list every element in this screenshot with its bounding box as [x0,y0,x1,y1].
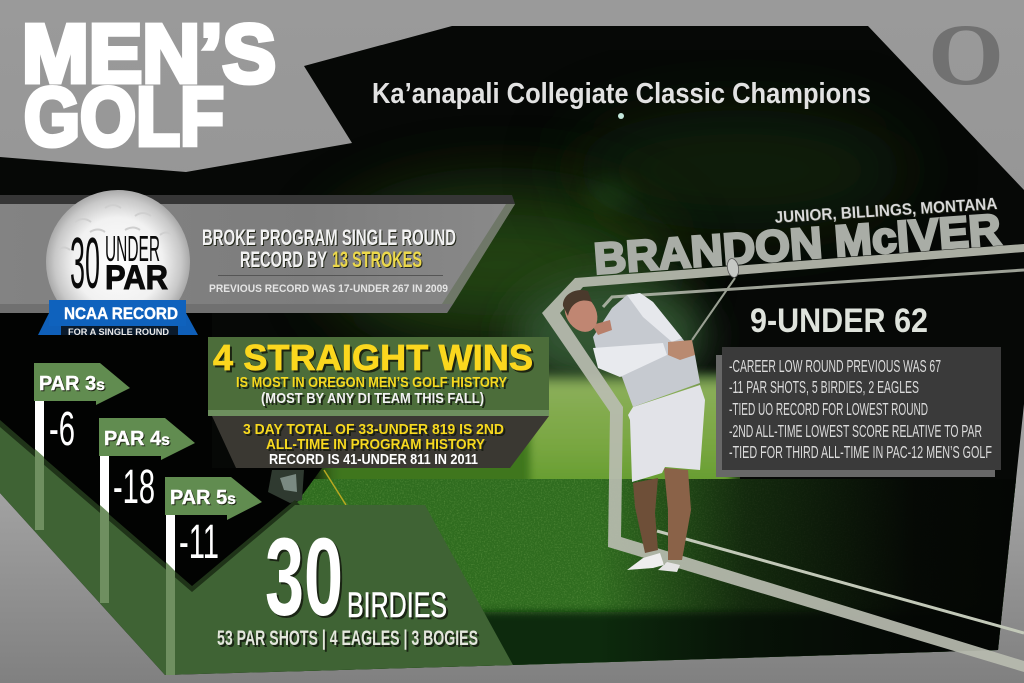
par 5s stat [165,477,262,675]
record text: BROKE PROGRAM SINGLE ROUND [202,225,456,250]
green stats panel [0,420,513,675]
record text: 13 STROKES [332,247,422,272]
panel: 4 straight wins: 4 STRAIGHT WINS [213,337,533,378]
30 under par: PAR [105,259,168,297]
birdies stat: 30 [265,516,343,639]
golf ball badge [46,190,190,334]
shoes [627,553,680,572]
grass [290,479,1024,679]
panel: 4 straight wins [208,337,549,416]
par 4s stat: PAR 4s [104,428,170,450]
legs [633,468,691,560]
par 3s stat: -6 [49,403,75,456]
par 4s stat [99,418,195,603]
black left region [290,468,322,504]
birdies stat: BIRDIES [347,586,447,625]
player name: BRANDON McIVER [592,205,1003,284]
golf ball in flight [618,113,624,119]
panel: 4 straight wins: IS MOST IN OREGON MEN’S GOLF HISTORY [236,374,507,391]
par 3s stat: PAR 3s [39,373,105,395]
golf ball badge: UNDER [105,228,160,269]
panel: 3 day total: 3 DAY TOTAL OF 33-UNDER 819 IS 2ND [243,421,504,438]
record text: RECORD BY [240,247,327,272]
par 5s stat: -11 [179,516,219,569]
panel: 3 day total: RECORD IS 41-UNDER 811 IN 2011 [269,452,478,468]
sweater body [593,293,700,407]
golf club [692,258,740,340]
birdies stat: 53 PAR SHOTS | 4 EAGLES | 3 BOGIES [217,627,478,650]
lawn [314,368,740,479]
panel: single round record [0,190,515,338]
panel: player frame outline [542,244,1024,672]
head [558,288,612,338]
par 4s stat: -18 [113,461,155,514]
par 3s stat [34,363,130,530]
golf bag detail [268,470,346,505]
panel: 4 straight wins: (MOST BY ANY DI TEAM THIS FALL) [261,390,484,407]
par 5s stat: PAR 5s [170,487,236,509]
panel: 3 day total: ALL-TIME IN PROGRAM HISTORY [266,436,485,453]
sweater sleeves [593,293,682,377]
subtitle: Ka’anapali Collegiate Classic Champions [372,78,871,110]
30 under par: 30 [70,224,100,304]
player score heading: 9-UNDER 62 [750,302,928,340]
panel: player stats [716,347,1001,477]
panel: 3 day total [212,416,549,468]
record text: PREVIOUS RECORD WAS 17-UNDER 267 IN 2009 [209,283,448,295]
ribbon: NCAA record [38,300,198,338]
hands [668,340,695,360]
record text [202,225,456,295]
player hometown: JUNIOR, BILLINGS, MONTANA [774,195,998,227]
icon: Oregon O logo: O [928,7,1004,104]
title [22,7,276,163]
ribbon: NCAA record: FOR A SINGLE ROUND [68,327,169,338]
birdies stat [217,516,478,650]
title: GOLF [24,70,224,163]
ribbon: NCAA record: NCAA RECORD [64,304,178,323]
title: MEN’S [22,7,276,100]
golfer figure [558,258,740,572]
shorts [628,385,705,482]
